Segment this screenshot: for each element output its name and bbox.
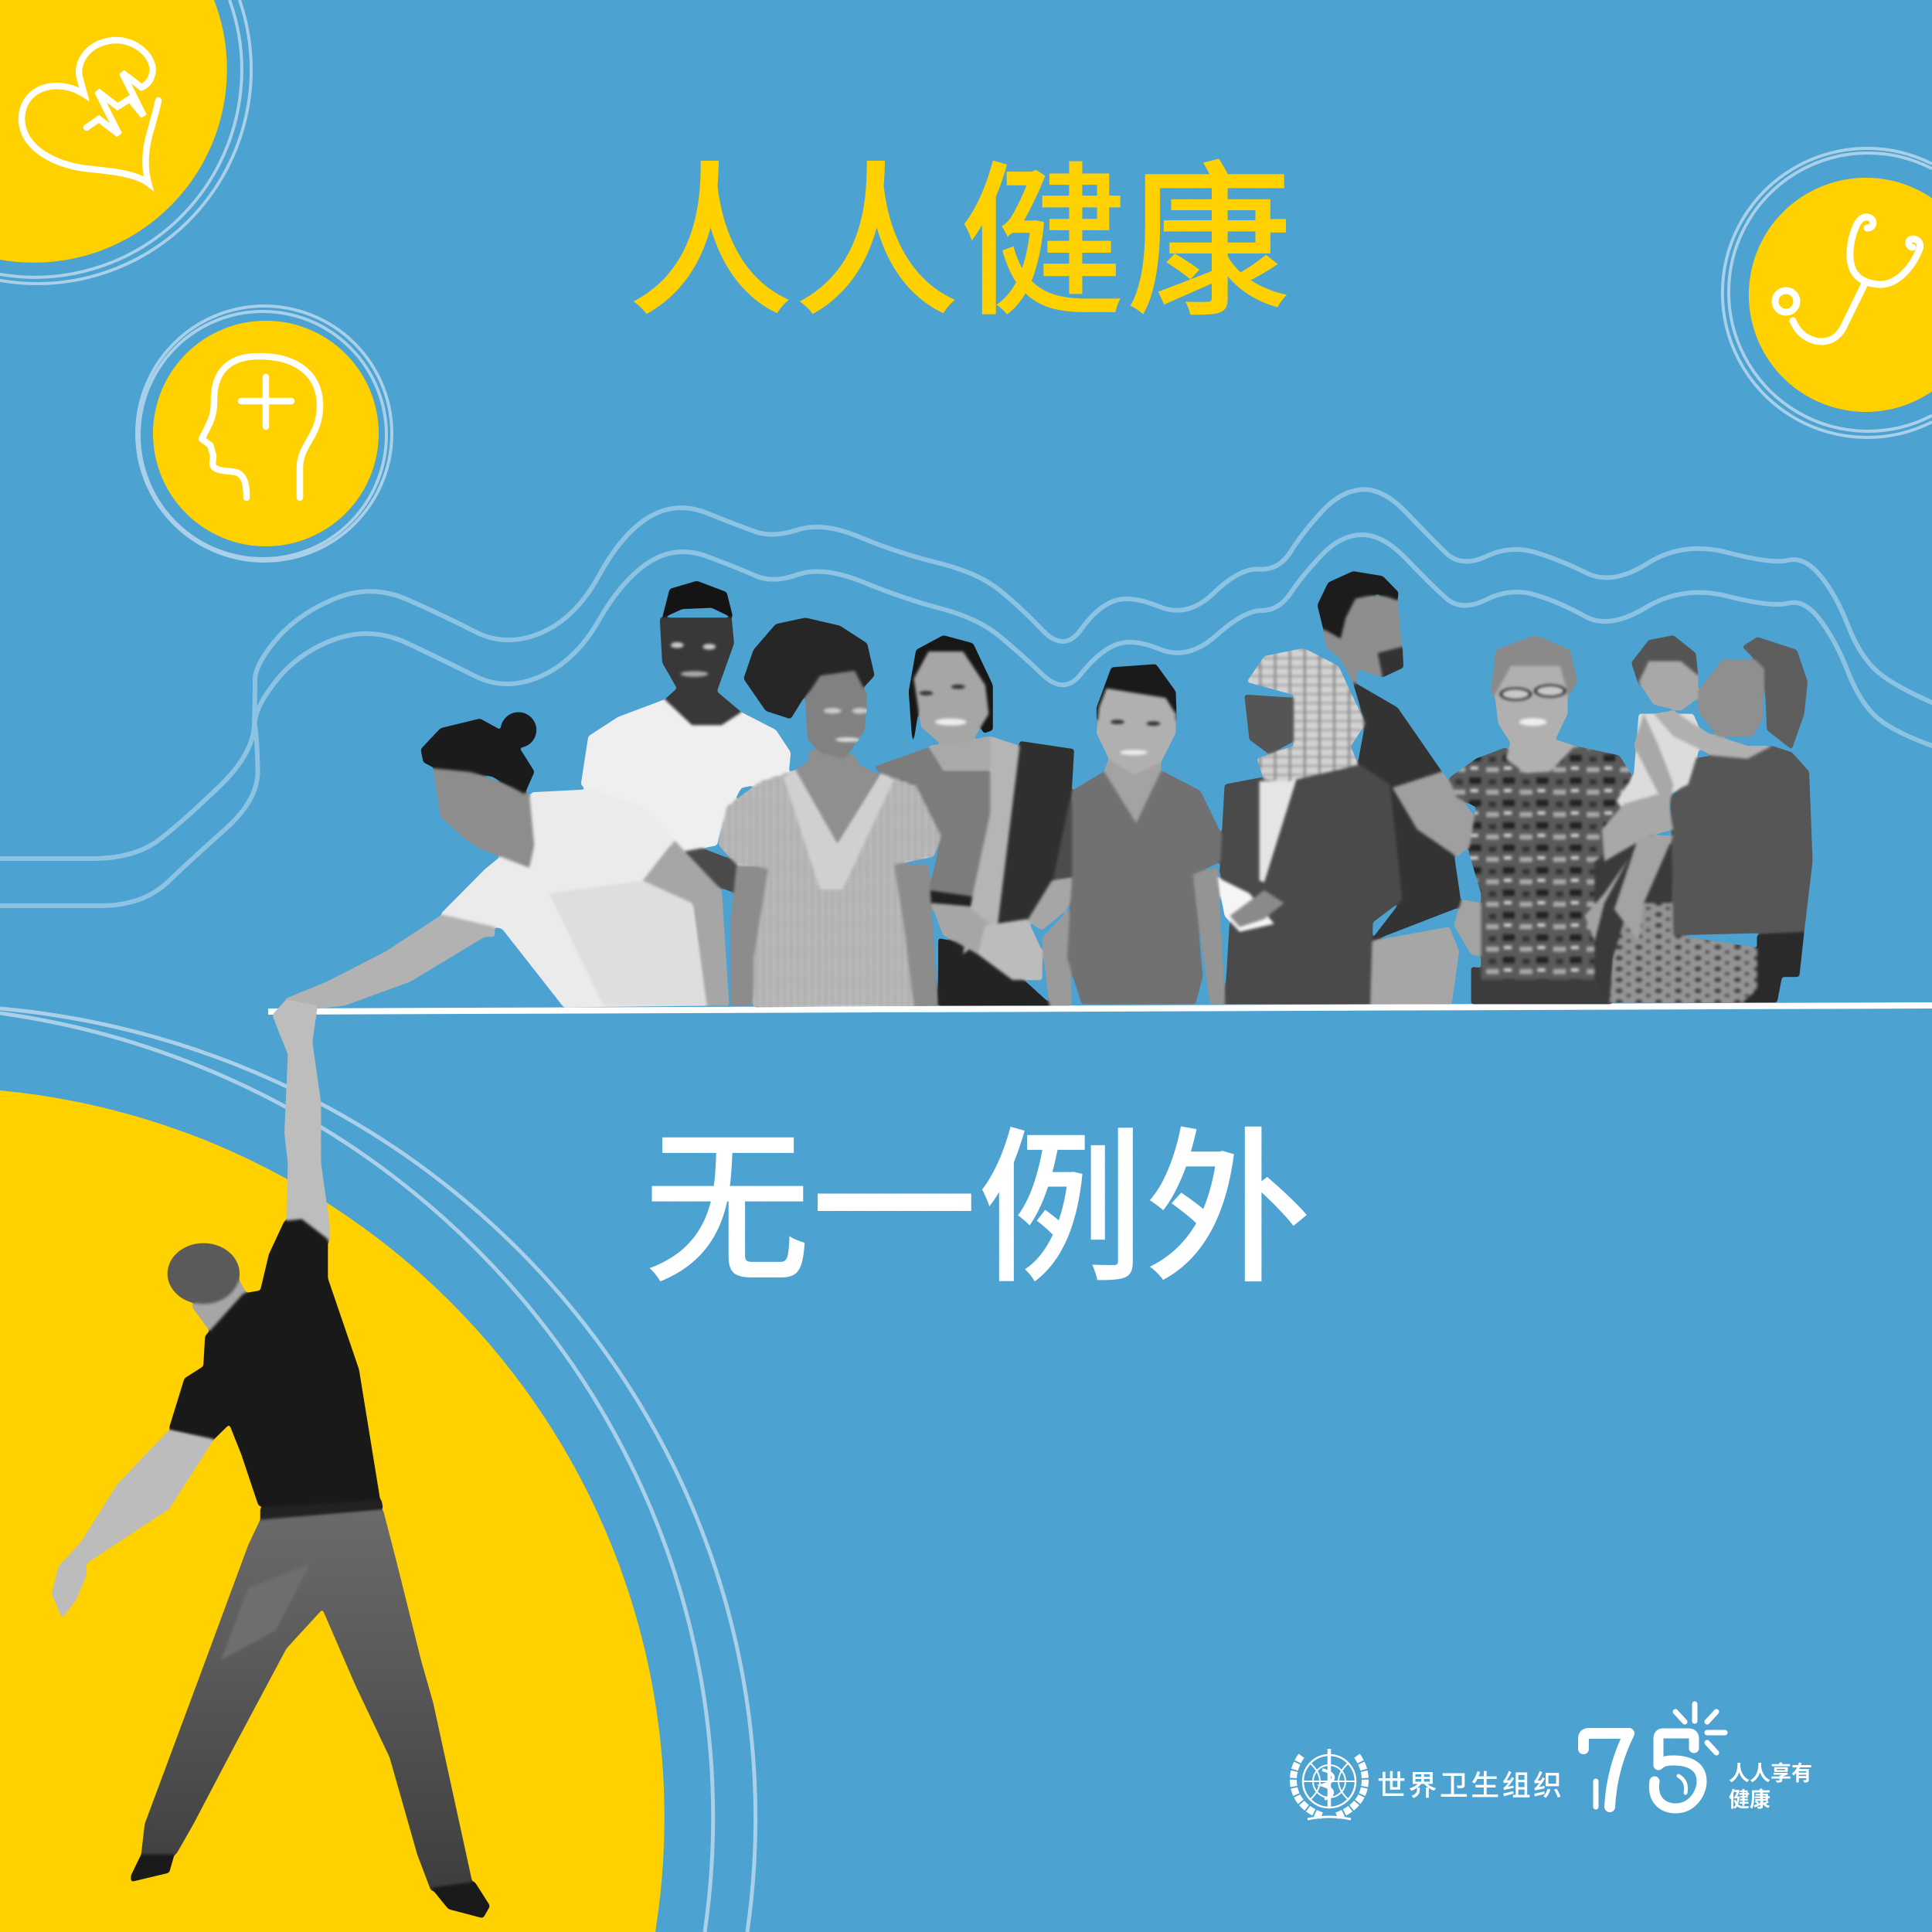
person: woman in hijab and blazer bbox=[1217, 648, 1403, 1004]
emblem: WHO bbox=[1293, 1749, 1366, 1819]
WHO and WHO75 logos: 健康 bbox=[1729, 1788, 1770, 1811]
person: man with beard and arms crossed bbox=[1318, 571, 1481, 1004]
person: young woman with patterned blouse bbox=[719, 618, 941, 1007]
decorative wavy lines bbox=[0, 489, 1932, 906]
icon: head with plus bbox=[202, 356, 320, 498]
belt bbox=[260, 1500, 383, 1520]
shoes bbox=[131, 1855, 490, 1918]
t-shirt bbox=[169, 1219, 381, 1509]
concentric rings around large circle bbox=[0, 1009, 756, 1932]
badge: broken heart bbox=[0, 0, 251, 284]
person: leaning man with hair bun bbox=[283, 713, 729, 1009]
badge: mental health head bbox=[137, 306, 392, 561]
person: older woman with glasses bbox=[1449, 635, 1631, 1004]
person: mother holding a baby bbox=[1585, 635, 1812, 1002]
logo: 75 bbox=[1583, 1704, 1725, 1808]
person: woman with shawl bbox=[874, 635, 1085, 1005]
person: boy in polo shirt bbox=[1042, 665, 1233, 1005]
icon: stethoscope bbox=[1775, 217, 1920, 342]
org name: 世界卫生组织 bbox=[1377, 1770, 1562, 1801]
jeans highlights bbox=[221, 1563, 311, 1661]
badge: stethoscope bbox=[1723, 148, 1932, 437]
white ledge line bbox=[268, 1002, 1932, 1015]
person: standing man in white t-shirt bbox=[581, 581, 791, 893]
hanging man bbox=[52, 1000, 490, 1918]
subtitle: 无一例外: 无一例外 bbox=[644, 1116, 1311, 1303]
raised arm bbox=[273, 1000, 329, 1242]
icon: heart bbox=[22, 40, 158, 183]
neck bbox=[192, 1278, 248, 1332]
title: 人人健康: 人人健康 bbox=[628, 150, 1292, 336]
WHO and WHO75 logos bbox=[1293, 1704, 1812, 1819]
jeans bbox=[141, 1510, 473, 1891]
left arm bbox=[52, 1430, 214, 1618]
group of people standing on the line bbox=[283, 571, 1812, 1009]
large yellow circle bbox=[0, 1090, 665, 1932]
head bbox=[168, 1243, 240, 1304]
tagline: 人人享有 bbox=[1729, 1762, 1812, 1785]
